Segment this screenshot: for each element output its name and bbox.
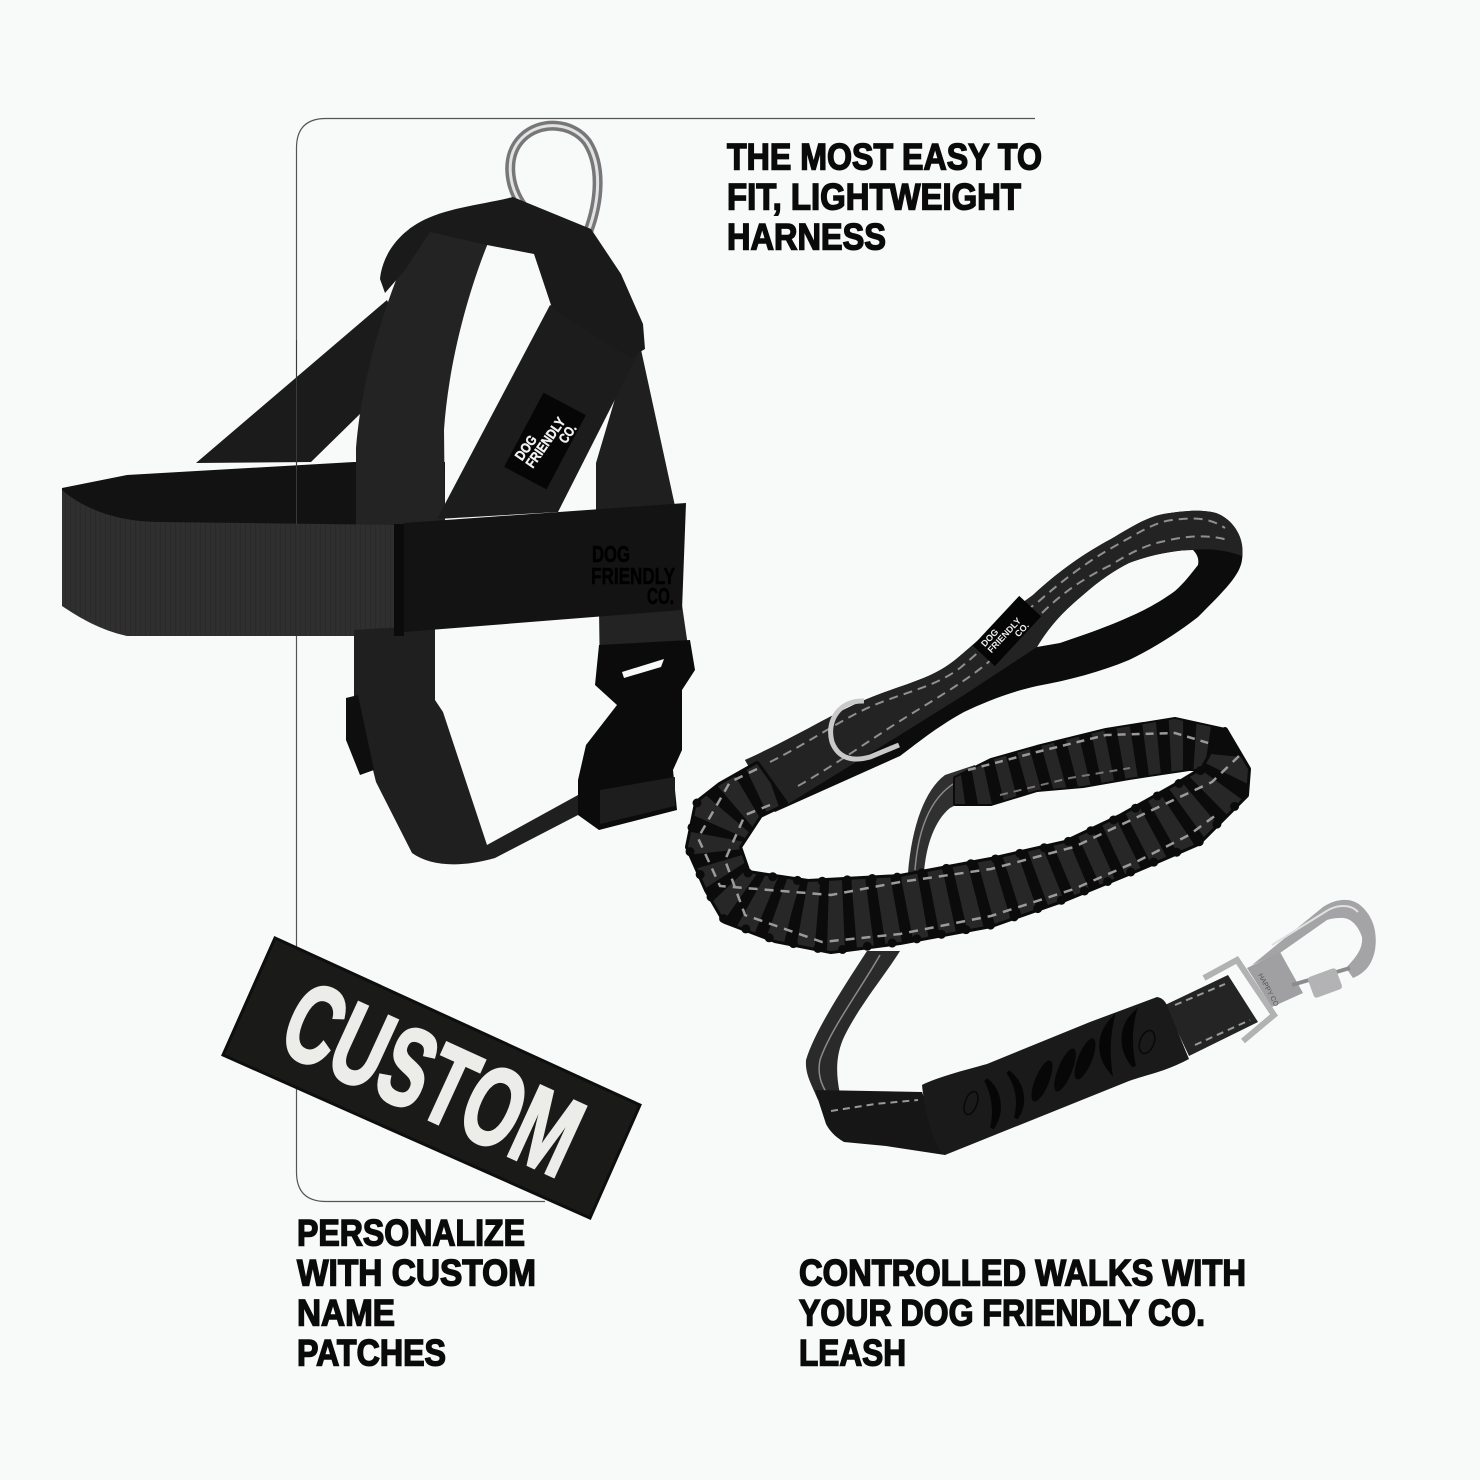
leash bbox=[688, 511, 1376, 1155]
heading: patches bbox=[297, 1212, 536, 1374]
icon: buckle bbox=[578, 640, 695, 830]
swivel band stitching bbox=[1175, 984, 1250, 1045]
lower slider bbox=[346, 695, 374, 775]
upper flat strap bbox=[908, 765, 975, 873]
heading: patches: NAME bbox=[297, 1292, 395, 1334]
diagonal back strap bbox=[196, 300, 405, 463]
right vertical strap bbox=[596, 345, 675, 510]
handle label: FRIENDLY bbox=[986, 616, 1023, 655]
harness bbox=[62, 126, 695, 864]
bungee main section bbox=[688, 730, 1248, 951]
woven label: CO. bbox=[555, 421, 580, 446]
woven label bbox=[504, 393, 587, 490]
heading: leash: LEASH bbox=[799, 1332, 906, 1374]
patch panel bbox=[404, 503, 686, 632]
heading: patches: PERSONALIZE bbox=[297, 1212, 525, 1254]
band stitching bbox=[831, 1100, 918, 1111]
heading: harness: FIT, LIGHTWEIGHT bbox=[727, 176, 1021, 218]
heading: harness: HARNESS bbox=[727, 216, 886, 258]
heading: leash bbox=[799, 1252, 1246, 1374]
lower left strap and bottom strap bbox=[354, 625, 578, 864]
line visible over harness bbox=[296, 340, 298, 525]
back belt inner bbox=[62, 462, 445, 530]
lower right strap bbox=[599, 605, 690, 680]
velcro edge bbox=[394, 524, 404, 636]
belt weave texture bbox=[62, 490, 402, 636]
woven label: FRIENDLY bbox=[522, 414, 569, 471]
strap stitching bbox=[819, 780, 960, 1092]
woven label: DOG bbox=[511, 432, 540, 463]
rubber grip bbox=[922, 997, 1189, 1155]
patch logo bbox=[591, 541, 675, 609]
handle label: CO. bbox=[1013, 621, 1031, 639]
heading: leash: CONTROLLED WALKS WITH bbox=[799, 1252, 1246, 1294]
patch logo: FRIENDLY bbox=[591, 563, 675, 589]
left shoulder strap bbox=[356, 227, 488, 527]
patch logo: CO. bbox=[647, 583, 674, 609]
handle webbing bbox=[745, 511, 1243, 812]
icon: D-ring bbox=[510, 126, 598, 232]
chest strap with label bbox=[437, 305, 640, 519]
patch logo: DOG bbox=[592, 541, 630, 567]
lower flat strap bbox=[806, 951, 900, 1100]
handle label: DOG bbox=[979, 627, 1000, 649]
heading: harness: THE MOST EASY TO bbox=[727, 136, 1042, 178]
custom name patch bbox=[223, 938, 640, 1218]
shoulder fold bbox=[380, 197, 645, 358]
heading: patches: PATCHES bbox=[297, 1332, 446, 1374]
handle loop padding bbox=[745, 511, 1243, 812]
icon: metal snap hook bbox=[1204, 900, 1376, 1041]
lower black band bbox=[815, 1090, 945, 1155]
bungee back section bbox=[950, 719, 1225, 804]
handle label bbox=[973, 596, 1041, 666]
heading: leash: YOUR DOG FRIENDLY CO. bbox=[799, 1292, 1205, 1334]
heading: harness bbox=[727, 136, 1042, 258]
handle stitching bbox=[770, 519, 1225, 762]
heading: patches: WITH CUSTOM bbox=[297, 1252, 536, 1294]
icon: leash D-ring bbox=[831, 701, 899, 759]
callout frame line bbox=[296, 118, 1035, 1202]
icon: metal snap hook: HAPPY CO bbox=[1256, 973, 1280, 1008]
front belt bbox=[62, 490, 402, 636]
upper band near swivel bbox=[1165, 975, 1258, 1056]
patch text: CUSTOM bbox=[265, 957, 601, 1201]
patch background bbox=[223, 938, 640, 1218]
